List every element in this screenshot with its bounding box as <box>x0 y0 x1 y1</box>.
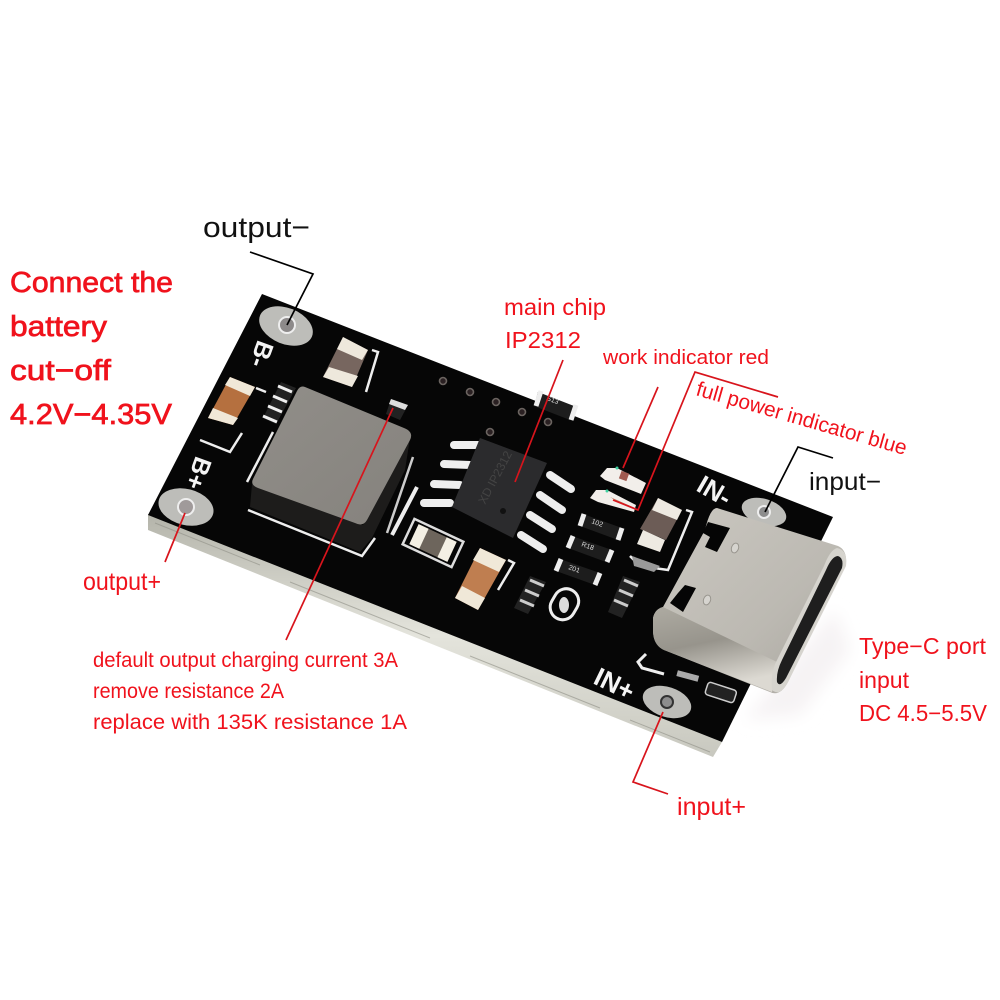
resistor 102 <box>580 514 622 540</box>
label type-c port: DC 4.5−5.5V <box>859 700 988 726</box>
silkscreen labels: IN+ <box>589 661 640 706</box>
usb type-c connector <box>653 508 846 693</box>
silkscreen labels: B- <box>243 337 279 371</box>
capacitor lower orange <box>455 548 514 610</box>
label output minus: output− <box>203 212 310 244</box>
leader line full power indicator <box>613 372 778 510</box>
label charging current notes: replace with 135K resistance 1A <box>93 711 407 734</box>
label charging current notes: default output charging current 3A <box>93 649 398 672</box>
resistor s13: S13 <box>545 395 560 406</box>
leader line main chip <box>515 360 563 482</box>
label full power indicator: full power indicator blue <box>694 378 910 460</box>
leader line work indicator <box>623 387 658 468</box>
usb shadow <box>745 610 850 720</box>
board side edge <box>148 514 722 757</box>
work indicator led <box>600 466 646 494</box>
pad IN- <box>738 493 790 531</box>
main chip pins <box>424 445 571 549</box>
pad B- <box>253 299 319 353</box>
small capacitor below inductor <box>403 519 463 567</box>
front rolled band <box>653 607 777 692</box>
silkscreen labels: IN- <box>692 469 737 513</box>
capacitor right of leds <box>630 498 692 572</box>
heading battery note: cut−off <box>10 355 112 387</box>
capacitor top brown <box>323 337 378 392</box>
label charging current notes <box>93 649 407 734</box>
via holes <box>440 378 552 436</box>
label type-c port <box>859 633 988 726</box>
capacitor left orange <box>200 377 266 452</box>
heading battery note: battery <box>10 311 108 343</box>
label input minus: input− <box>809 468 881 496</box>
resistor r18: R18 <box>580 541 595 552</box>
label main chip: main chip <box>504 294 606 320</box>
notch bottom <box>670 585 696 612</box>
small package lower left <box>514 576 546 614</box>
resistor 201 <box>556 559 600 585</box>
label input plus: input+ <box>677 793 746 821</box>
main chip ip2312: XD IP2312 <box>475 448 515 506</box>
label type-c port: input <box>859 667 910 693</box>
heading battery note <box>10 267 173 431</box>
leader line input plus <box>633 712 668 794</box>
silk logo oval <box>546 584 583 624</box>
pad IN+ <box>639 680 695 724</box>
label charging current notes: remove resistance 2A <box>93 680 284 703</box>
notch top <box>703 522 730 552</box>
pad B+ <box>154 483 218 531</box>
heading battery note: Connect the <box>10 267 173 299</box>
dimple top <box>730 542 740 554</box>
label main chip <box>504 294 606 353</box>
label main chip: IP2312 <box>505 327 581 353</box>
full power indicator led <box>590 490 636 512</box>
label output plus: output+ <box>83 568 161 596</box>
heading battery note: 4.2V−4.35V <box>10 399 173 431</box>
resistor 102: 102 <box>590 518 604 529</box>
label type-c port: Type−C port <box>859 633 987 659</box>
small ic left of inductor <box>263 382 296 424</box>
pcb board <box>148 294 833 757</box>
port rim and opening <box>772 548 846 692</box>
small package right <box>608 576 640 618</box>
dimple bottom <box>702 594 712 606</box>
small resistor top of inductor <box>386 399 408 420</box>
label work indicator: work indicator red <box>602 347 769 369</box>
leader line output minus <box>250 252 313 325</box>
resistor 201: 201 <box>567 564 581 575</box>
leader line output plus <box>165 513 185 562</box>
small parts under usb <box>638 654 737 703</box>
silkscreen labels: B+ <box>179 453 217 493</box>
main chip ip2312 <box>452 438 547 538</box>
resistor r18 <box>568 536 612 562</box>
inductor <box>247 386 417 556</box>
leader line input minus <box>765 447 833 512</box>
silkscreen labels <box>179 337 737 706</box>
board top surface <box>148 294 833 742</box>
leader line charging current <box>286 408 393 640</box>
resistor s13 <box>534 391 576 420</box>
edge streaks <box>155 523 710 752</box>
